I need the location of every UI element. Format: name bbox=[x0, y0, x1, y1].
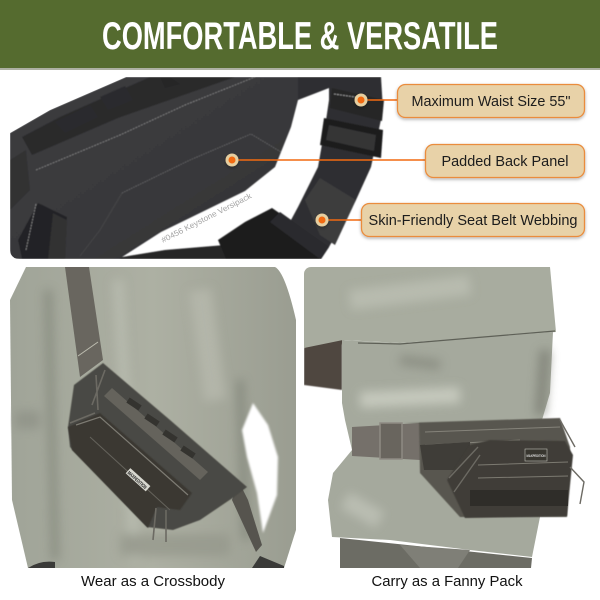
lower shirt bbox=[328, 332, 553, 557]
brand label: MAXPEDITION bbox=[526, 453, 546, 458]
title banner bbox=[0, 0, 600, 70]
side release buckle bbox=[218, 208, 329, 259]
zipper pulls bbox=[70, 370, 166, 542]
bag body bbox=[10, 77, 298, 259]
gap between arm and torso bbox=[242, 403, 278, 533]
bottom strap bbox=[118, 244, 226, 259]
brand label bbox=[126, 468, 150, 491]
upper shirt bbox=[304, 267, 556, 348]
stitching bbox=[36, 77, 255, 170]
strap bbox=[290, 77, 384, 259]
bag body bbox=[68, 363, 247, 530]
watermark: #0456 Keystone Versipack bbox=[160, 191, 254, 245]
ladder buckle bbox=[320, 118, 383, 158]
callout: padded back panel: Padded Back Panel bbox=[442, 154, 568, 170]
callout: seat belt webbing: Skin-Friendly Seat Belt Webbing bbox=[368, 213, 578, 229]
front pocket bbox=[68, 413, 192, 528]
molle top bbox=[104, 388, 208, 480]
photo: crossbody wear bbox=[10, 267, 296, 568]
front pocket bbox=[447, 440, 573, 518]
strap adjuster webbing bbox=[330, 88, 384, 121]
callout: maximum waist size: Maximum Waist Size 55" bbox=[412, 94, 570, 110]
waist belt bbox=[352, 423, 420, 460]
zipper pulls bbox=[449, 420, 584, 504]
brand label bbox=[525, 449, 547, 461]
photo: fanny pack carry bbox=[304, 267, 584, 568]
callout: padded back panel bbox=[226, 144, 584, 178]
jacket bbox=[10, 267, 296, 568]
callout: maximum waist size bbox=[354, 84, 584, 118]
caption: crossbody: Wear as a Crossbody bbox=[81, 574, 226, 590]
shoulder strap bbox=[65, 267, 103, 377]
belt buckle bbox=[380, 423, 402, 459]
brand label: MAXPEDITION bbox=[126, 470, 148, 491]
pants bbox=[340, 538, 532, 568]
hands bbox=[28, 556, 284, 568]
pack body bbox=[403, 418, 570, 517]
lower strap bbox=[232, 490, 262, 552]
arm shadow bbox=[304, 340, 344, 391]
caption: fanny pack: Carry as a Fanny Pack bbox=[372, 574, 523, 590]
side strap buckle bbox=[18, 203, 67, 259]
callout: seat belt webbing bbox=[316, 204, 584, 236]
photo: back of bag with strap bbox=[10, 77, 384, 259]
